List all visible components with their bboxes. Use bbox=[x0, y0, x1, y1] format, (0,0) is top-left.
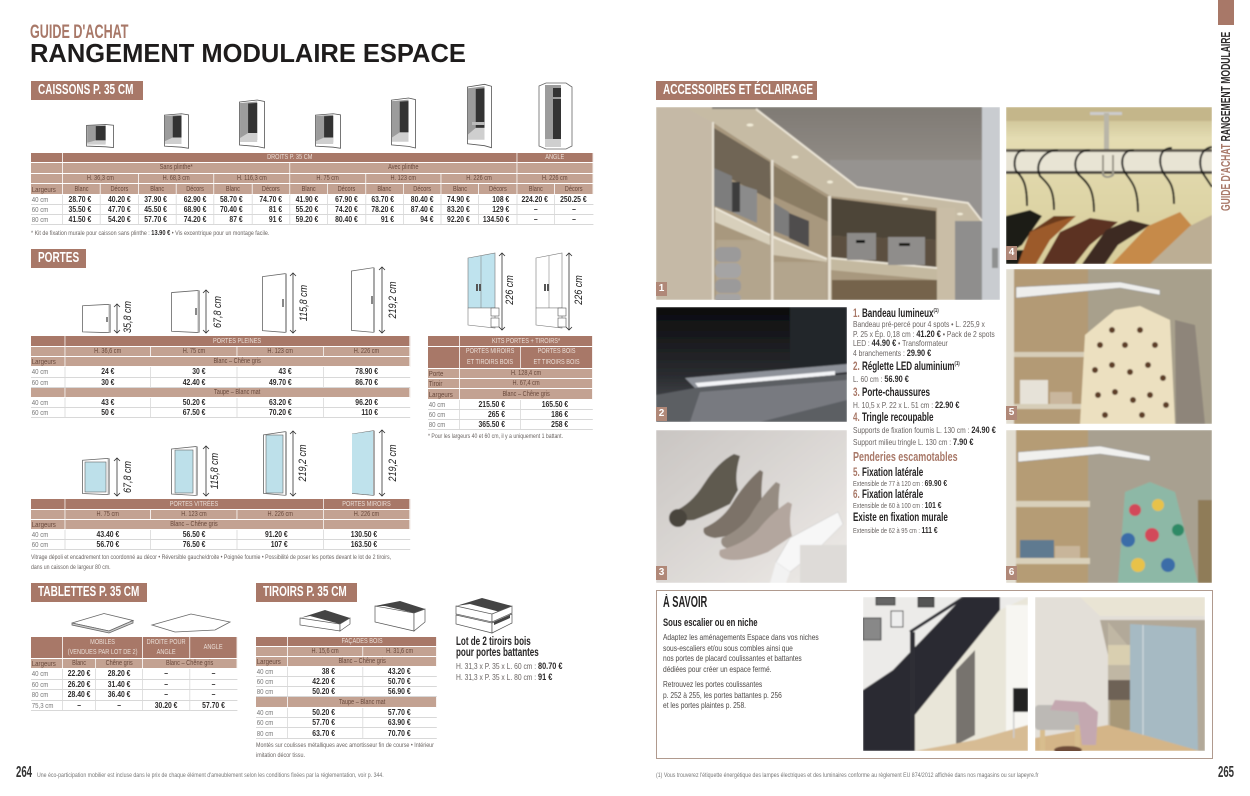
table: caissons: DROITS P. 35 CM bbox=[267, 154, 312, 161]
table: tablettes: (VENDUES PAR LOT DE 2) bbox=[68, 648, 138, 656]
table: portes pleines: PORTES PLEINES bbox=[213, 338, 261, 344]
note: portes vitrées: Vitrage dépoli et encadrement ton coordonné au décor • Réversible gauche/droite • Poignée fournie • Possibilité de poser les portes devant le lot de 2 tiroirs, bbox=[31, 554, 391, 561]
text: accessoires list: Extensible de 62 à 95 cm : 111 € bbox=[853, 525, 938, 535]
photo 4: tringle recoupable bbox=[1006, 107, 1212, 264]
text: à savoir bbox=[663, 632, 819, 710]
table: caissons: H. 116,3 cm bbox=[237, 175, 267, 182]
photo number 3: 3 bbox=[659, 567, 664, 578]
table: tiroirs: H. 31,6 cm bbox=[386, 648, 413, 655]
table: caissons: Avec plinthe bbox=[388, 164, 418, 171]
text: accessoires list: H. 10,5 x P. 22 x L. 51 cm : 22.90 € bbox=[853, 400, 960, 410]
photo 5: fixation latérale blouse bbox=[1006, 269, 1212, 424]
text: à savoir: nos portes de placard coulissantes et battantes bbox=[663, 653, 802, 663]
table: tablettes: 40 cm bbox=[32, 669, 48, 678]
text: lot de 2 tiroirs: pour portes battantes bbox=[456, 647, 539, 659]
icon: kits portes et tiroirs: 226 cm bbox=[573, 275, 585, 306]
table: kits portes et tiroirs: ET TIROIRS BOIS bbox=[534, 358, 580, 366]
table: tiroirs: FAÇADES BOIS bbox=[342, 638, 383, 645]
note: portes vitrées: dans un caisson de largeur 80 cm. bbox=[31, 564, 111, 570]
title: rangement modulaire espace: RANGEMENT MODULAIRE ESPACE bbox=[30, 40, 466, 68]
photo: escalier bbox=[863, 597, 1028, 751]
icon: portes vitrées et miroirs bbox=[83, 430, 399, 496]
photo number 1: 1 bbox=[659, 283, 664, 294]
table: kits portes et tiroirs: 60 cm bbox=[429, 410, 445, 419]
table: kits portes et tiroirs: ET TIROIRS BOIS bbox=[467, 358, 513, 366]
text: accessoires list: LED : 44.90 € • Transformateur bbox=[853, 338, 948, 348]
icon: portes pleines: 67,8 cm bbox=[212, 296, 224, 328]
table: tiroirs: Blanc – Chêne gris bbox=[338, 658, 386, 665]
text: à savoir: dédiées pour créer un espace fermé. Retrouvez les portes coulissantes bbox=[663, 664, 771, 689]
icon: portes pleines: 115,8 cm bbox=[298, 285, 310, 321]
photo 6: fixation latérale chemise bbox=[1006, 430, 1212, 583]
table: kits portes et tiroirs: 40 cm bbox=[429, 400, 445, 409]
table: caissons: Décors bbox=[565, 186, 583, 192]
table: portes pleines: H. 226 cm bbox=[354, 348, 379, 355]
heading: portes: PORTES bbox=[38, 250, 79, 266]
table: tiroirs: Largeurs bbox=[257, 657, 281, 666]
text: lot de 2 tiroirs bbox=[456, 636, 563, 682]
table: tablettes bbox=[31, 637, 238, 711]
page number 265: 265 bbox=[1218, 764, 1234, 781]
table: tiroirs: H. 15,6 cm bbox=[312, 648, 339, 655]
table: tablettes: 60 cm bbox=[32, 680, 48, 689]
table: tiroirs: 40 cm bbox=[257, 708, 273, 717]
table: portes vitrées et miroirs: H. 226 cm bbox=[267, 511, 293, 518]
table: kits portes et tiroirs: Largeurs bbox=[429, 390, 453, 398]
icon: portes vitrées et miroirs: 219,2 cm bbox=[387, 444, 399, 482]
table: portes vitrées et miroirs: PORTES VITRÉES bbox=[170, 500, 218, 508]
table: kits portes et tiroirs: Blanc – Chêne gris bbox=[502, 390, 550, 398]
table: tiroirs: 80 cm bbox=[257, 728, 273, 738]
table: portes pleines: 40 cm bbox=[32, 398, 48, 407]
text: accessoires list: 1. Bandeau lumineux(1) bbox=[853, 308, 939, 320]
table: caissons: Décors bbox=[489, 186, 507, 192]
table: caissons: Blanc bbox=[150, 186, 164, 192]
note: tiroirs bbox=[256, 742, 434, 758]
icon: portes vitrées et miroirs: 219,2 cm bbox=[297, 444, 309, 482]
table: caissons bbox=[31, 153, 594, 225]
table: caissons: 60 cm bbox=[32, 205, 48, 214]
table: portes pleines: Taupe – Blanc mat bbox=[214, 389, 260, 396]
table: tiroirs: 40 cm bbox=[257, 667, 273, 676]
table: tiroirs: 80 cm bbox=[257, 687, 273, 696]
subheading: sous escalier: Sous escalier ou en niche bbox=[663, 617, 758, 629]
table: portes vitrées et miroirs: 40 cm bbox=[32, 530, 48, 539]
table: caissons: Blanc bbox=[529, 186, 543, 192]
table: portes vitrées et miroirs: Largeurs bbox=[32, 520, 56, 529]
photo: combles bbox=[1035, 597, 1205, 751]
photo 3: porte-chaussures bbox=[656, 430, 847, 583]
table: portes pleines: H. 36,6 cm bbox=[94, 348, 121, 355]
table: caissons: Sans plinthe* bbox=[160, 164, 193, 171]
text: lot de 2 tiroirs: H. 31,3 x P. 35 x L. 80 cm : 91 € bbox=[456, 672, 552, 682]
table: portes pleines: H. 75 cm bbox=[183, 348, 205, 355]
footer: éco-participation: Une éco-participation mobilier est incluse dans le prix de chaque élément d'ameublement selon les conditions fixées par la réglementation, voir p. 344. bbox=[37, 772, 384, 779]
table: portes pleines bbox=[31, 336, 410, 418]
table: kits portes et tiroirs: Porte bbox=[429, 369, 443, 378]
table: tiroirs: 60 cm bbox=[257, 718, 273, 727]
text: accessoires list bbox=[853, 308, 996, 535]
table: portes pleines: 40 cm bbox=[32, 367, 48, 376]
text: accessoires list: 4. Tringle recoupable bbox=[853, 412, 934, 424]
note: tiroirs: Montés sur coulisses métalliques avec amortisseur fin de course • Intérieur bbox=[256, 742, 434, 749]
table: caissons: Blanc bbox=[302, 186, 316, 192]
table: caissons: 80 cm bbox=[32, 215, 48, 224]
table: tiroirs bbox=[256, 637, 437, 739]
table: tablettes: 75,3 cm bbox=[32, 701, 53, 710]
table: caissons: Blanc bbox=[226, 186, 240, 192]
heading: accessoires et éclairage: ACCESSOIRES ET ÉCLAIRAGE bbox=[663, 82, 813, 98]
table: portes vitrées et miroirs: PORTES MIROIRS bbox=[342, 500, 391, 508]
table: portes pleines: 60 cm bbox=[32, 408, 48, 417]
table: tablettes: ANGLE bbox=[204, 644, 223, 650]
icon: portes vitrées et miroirs: 115,8 cm bbox=[209, 453, 221, 489]
text: à savoir: et les portes plaintes p. 258. bbox=[663, 700, 746, 710]
table: kits portes et tiroirs: PORTES MIROIRS bbox=[466, 348, 514, 355]
table: tablettes: DROITE POUR bbox=[147, 638, 186, 646]
text: lot de 2 tiroirs: H. 31,3 x P. 35 x L. 60 cm : 80.70 € bbox=[456, 661, 563, 671]
table: portes pleines: Blanc – Chêne gris bbox=[213, 358, 261, 365]
heading: tiroirs bbox=[256, 583, 357, 602]
table: caissons: 40 cm bbox=[32, 195, 48, 204]
photo number 4: 4 bbox=[1009, 247, 1014, 258]
table: portes pleines: 60 cm bbox=[32, 378, 48, 387]
photo 2: réglette LED bbox=[656, 307, 847, 422]
photo number 4 bbox=[1006, 246, 1017, 260]
photo number 1 bbox=[656, 282, 667, 296]
table: caissons: H. 226 cm bbox=[466, 175, 492, 182]
photo number 6 bbox=[1006, 566, 1017, 580]
table: caissons: Décors bbox=[338, 186, 355, 192]
text: accessoires list: Support milieu tringle L. 130 cm : 7.90 € bbox=[853, 437, 973, 447]
table: caissons: ANGLE bbox=[545, 154, 564, 161]
text: à savoir: sous-escaliers et/ou sous combles ainsi que bbox=[663, 643, 793, 653]
table: portes vitrées et miroirs: H. 75 cm bbox=[97, 511, 119, 518]
text: accessoires list: 4 branchements : 29.90 € bbox=[853, 348, 931, 358]
icon: kits portes et tiroirs: 226 cm bbox=[504, 275, 516, 306]
table: tablettes: ANGLE bbox=[157, 648, 176, 656]
note: tiroirs: imitation décor tissu. bbox=[256, 752, 305, 758]
table: caissons: Blanc bbox=[75, 186, 89, 192]
table: tablettes: Largeurs bbox=[32, 659, 56, 668]
text: accessoires list: Extensible de 60 à 100 cm : 101 € bbox=[853, 500, 941, 510]
table: tablettes: 80 cm bbox=[32, 690, 48, 699]
icon: caissons bbox=[87, 83, 572, 149]
table: caissons: H. 226 cm bbox=[542, 175, 568, 182]
footer: étiquette énergétique: (1) Vous trouverez l'étiquette énergétique des lampes électriques et des luminaires conforme au règlement EU 874/2012 affichée dans nos magasins ou sur lapeyre.fr bbox=[656, 772, 1039, 779]
photo number 6: 6 bbox=[1009, 567, 1014, 578]
photo number 2 bbox=[656, 407, 667, 421]
text: accessoires list: Supports de fixation fournis L. 130 cm : 24.90 € bbox=[853, 425, 996, 435]
table: kits portes et tiroirs: PORTES BOIS bbox=[538, 348, 576, 355]
table: portes vitrées et miroirs: H. 226 cm bbox=[354, 511, 379, 518]
icon: portes pleines: 35,8 cm bbox=[122, 301, 134, 333]
side label: GUIDE D'ACHAT RANGEMENT MODULAIRE bbox=[1218, 32, 1233, 211]
table: caissons: Décors bbox=[262, 186, 280, 192]
photo 1: bandeau lumineux bbox=[656, 107, 1000, 300]
table: caissons: H. 75 cm bbox=[316, 175, 339, 182]
table: portes vitrées et miroirs bbox=[31, 499, 410, 550]
text: lot de 2 tiroirs: Lot de 2 tiroirs bois bbox=[456, 636, 531, 648]
table: portes vitrées et miroirs: 60 cm bbox=[32, 540, 48, 549]
table: portes vitrées et miroirs: Blanc – Chêne gris bbox=[170, 521, 218, 528]
table: caissons: Largeurs bbox=[32, 184, 56, 194]
icon: tiroirs bbox=[300, 598, 512, 633]
text: à savoir: p. 252 à 255, les portes battantes p. 256 bbox=[663, 690, 782, 700]
heading: tiroirs: TIROIRS P. 35 CM bbox=[263, 584, 347, 600]
table: tablettes: Blanc – Chêne gris bbox=[166, 660, 213, 667]
note: caissons: * Kit de fixation murale pour caisson sans plinthe : 13.90 € • Vis excentrique pour un montage facile. bbox=[31, 228, 269, 237]
table: kits portes et tiroirs bbox=[428, 336, 593, 430]
table: caissons: Blanc bbox=[377, 186, 391, 192]
text: accessoires list: Bandeau pré-percé pour 4 spots • L. 225,9 x bbox=[853, 319, 985, 329]
photo number 5 bbox=[1006, 406, 1017, 420]
text: accessoires list: L. 60 cm : 56.90 € bbox=[853, 374, 909, 384]
text: accessoires list: 5. Fixation latérale bbox=[853, 467, 923, 479]
table: caissons: H. 68,3 cm bbox=[163, 175, 190, 182]
table: caissons: Décors bbox=[413, 186, 431, 192]
heading: caissons: CAISSONS P. 35 CM bbox=[38, 82, 133, 98]
note: kits: * Pour les largeurs 40 et 60 cm, il y a uniquement 1 battant. bbox=[428, 433, 563, 440]
text: accessoires list: 3. Porte-chaussures bbox=[853, 387, 930, 399]
text: accessoires list: 6. Fixation latérale bbox=[853, 489, 923, 501]
table: portes pleines: H. 123 cm bbox=[267, 348, 293, 355]
icon: kits portes et tiroirs bbox=[468, 253, 585, 330]
icon: tablettes bbox=[72, 614, 230, 633]
table: tiroirs: Taupe – Blanc mat bbox=[339, 698, 385, 706]
table: caissons: Décors bbox=[186, 186, 204, 192]
icon: portes vitrées et miroirs: 67,8 cm bbox=[122, 461, 134, 493]
table: kits portes et tiroirs: Tiroir bbox=[429, 379, 442, 388]
text: accessoires list: P. 25 x Ép. 0,18 cm : 41.20 € • Pack de 2 spots bbox=[853, 329, 995, 339]
icon: portes pleines: 219,2 cm bbox=[387, 281, 399, 319]
table: caissons: H. 123 cm bbox=[390, 175, 416, 182]
table: caissons: Décors bbox=[110, 186, 128, 192]
photo number 2: 2 bbox=[659, 408, 664, 419]
table: kits portes et tiroirs: 80 cm bbox=[429, 420, 445, 429]
page number 264: 264 bbox=[16, 764, 32, 781]
table: portes vitrées et miroirs: H. 123 cm bbox=[181, 511, 207, 518]
text: accessoires list: Penderies escamotables bbox=[853, 449, 958, 464]
table: tablettes: Chêne gris bbox=[106, 660, 133, 667]
note: portes vitrées bbox=[31, 554, 391, 570]
heading: portes bbox=[31, 249, 86, 268]
table: tablettes: Blanc bbox=[72, 660, 86, 667]
photo number 5: 5 bbox=[1009, 407, 1014, 418]
icon: portes pleines bbox=[83, 267, 399, 333]
text: accessoires list: Extensible de 77 à 120 cm : 69.90 € bbox=[853, 478, 947, 488]
title: guide d'achat: GUIDE D'ACHAT bbox=[30, 21, 128, 43]
table: kits portes et tiroirs: KITS PORTES + TIROIRS* bbox=[492, 338, 560, 344]
panel: à savoir bbox=[656, 590, 1213, 759]
table: kits portes et tiroirs: H. 67,4 cm bbox=[513, 380, 540, 387]
text: accessoires list: Existe en fixation murale bbox=[853, 512, 948, 524]
table: caissons: Blanc bbox=[453, 186, 467, 192]
table: tablettes: MOBILES bbox=[90, 638, 115, 646]
text: accessoires list: 2. Réglette LED aluminium(1) bbox=[853, 361, 960, 373]
side tab bbox=[1218, 0, 1234, 25]
heading: tablettes: TABLETTES P. 35 CM bbox=[38, 584, 139, 600]
photo number 3 bbox=[656, 566, 667, 580]
table: portes pleines: Largeurs bbox=[32, 357, 56, 366]
table: tiroirs: 60 cm bbox=[257, 677, 273, 686]
heading: à savoir: À SAVOIR bbox=[663, 594, 707, 611]
table: kits portes et tiroirs: H. 128,4 cm bbox=[511, 370, 541, 377]
text: à savoir: Adaptez les aménagements Espace dans vos niches bbox=[663, 632, 819, 642]
table: caissons: H. 36,3 cm bbox=[87, 175, 114, 182]
